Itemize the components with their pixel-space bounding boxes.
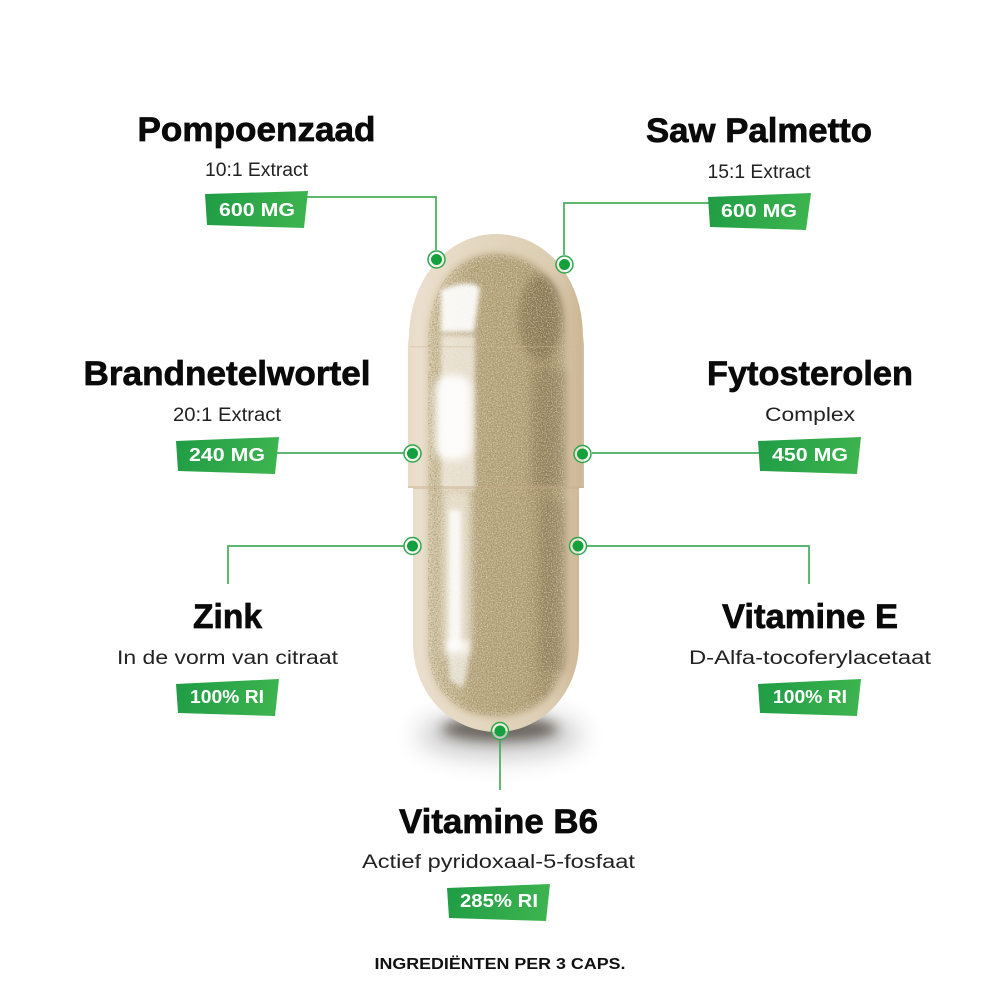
marker: fytosterolen [574, 446, 591, 462]
capsule [400, 230, 590, 740]
panel: Vitamine B6 [362, 803, 636, 921]
subtitle: Complex [765, 405, 856, 426]
marker: vitamine B6 [492, 722, 508, 740]
badge [447, 884, 550, 921]
badge [176, 437, 279, 474]
subtitle: 10:1 Extract [205, 160, 309, 181]
subtitle: 20:1 Extract [173, 405, 282, 426]
marker dots [404, 251, 591, 740]
capsule powder fill [420, 250, 570, 720]
panel: Saw Palmetto [646, 112, 872, 230]
subtitle: In de vorm van citraat [117, 648, 339, 669]
heading: Fytosterolen [707, 355, 913, 393]
marker: zink [404, 538, 421, 554]
badge [708, 193, 811, 230]
heading: Vitamine E [722, 598, 898, 636]
heading: Vitamine B6 [399, 803, 598, 841]
panel: Fytosterolen [707, 355, 913, 474]
badge: 600 MG [721, 200, 797, 221]
heading: Zink [193, 598, 262, 636]
panel: Vitamine E [689, 598, 932, 716]
badge [758, 679, 861, 716]
marker: brandnetelwortel [404, 445, 421, 462]
badge: 240 MG [189, 444, 265, 465]
panel: Brandnetelwortel [84, 355, 370, 474]
panel: Pompoenzaad [138, 111, 376, 228]
badge [176, 679, 279, 716]
badge: 100% RI [190, 686, 264, 707]
capsule shell [400, 230, 590, 740]
subtitle: 15:1 Extract [708, 162, 811, 183]
capsule drop shadow [418, 713, 582, 757]
footnote: INGREDIËNTEN PER 3 CAPS. [374, 955, 626, 973]
subtitle: Actief pyridoxaal-5-fosfaat [362, 852, 636, 873]
marker: saw palmetto [556, 256, 573, 273]
badge: 450 MG [772, 444, 848, 465]
marker: vitamine E [570, 538, 586, 554]
badge [205, 191, 308, 228]
badge: 285% RI [460, 890, 538, 911]
heading: Pompoenzaad [138, 111, 376, 149]
heading: Brandnetelwortel [84, 355, 370, 393]
badge: 600 MG [219, 199, 295, 220]
connector lines [228, 197, 809, 790]
marker: pompoenzaad [428, 251, 445, 268]
badge [758, 437, 861, 474]
capsule highlights [408, 283, 584, 688]
panel: Zink [117, 598, 339, 716]
badge: 100% RI [773, 686, 847, 707]
heading: Saw Palmetto [646, 112, 872, 150]
subtitle: D-Alfa-tocoferylacetaat [689, 648, 932, 669]
